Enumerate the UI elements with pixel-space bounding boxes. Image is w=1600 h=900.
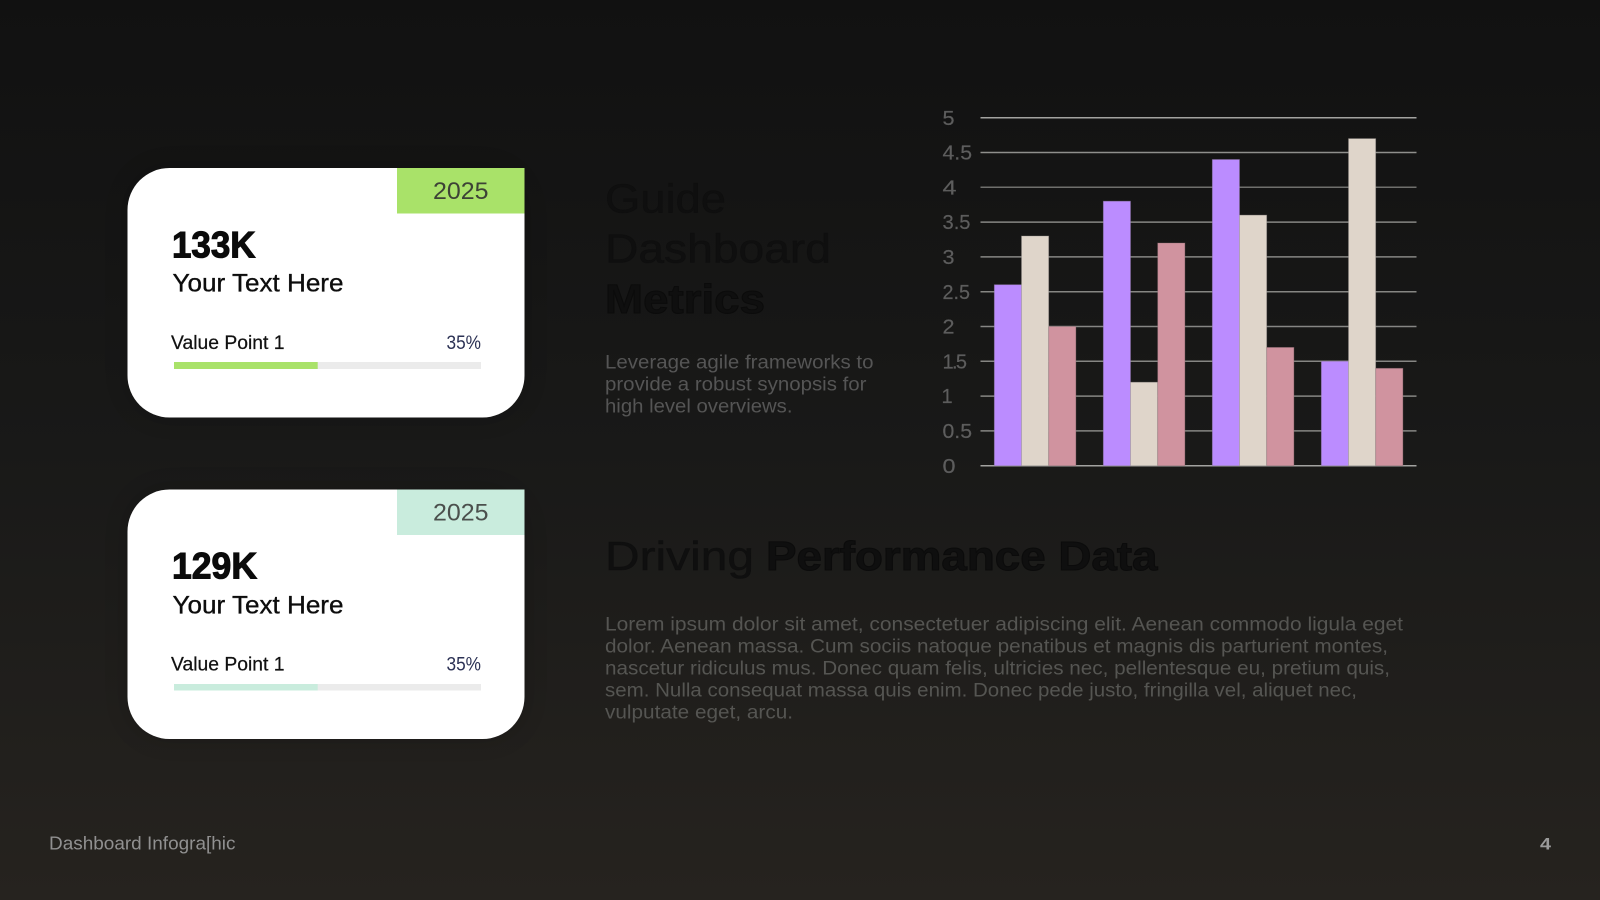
chart axis labels: 4.5 bbox=[942, 143, 972, 165]
text block: lorem ipsum: nascetur ridiculus mus. Donec quam felis, ultricies nec, pellentesque eu, pretium quis, bbox=[605, 659, 1390, 680]
text block: lorem ipsum bbox=[605, 615, 1404, 724]
panel: card 1 bbox=[128, 168, 524, 418]
year badge: card 2: 2025 bbox=[433, 500, 488, 526]
heading: guide dashboard metrics bbox=[605, 176, 831, 322]
text block: lorem ipsum: vulputate eget, arcu. bbox=[605, 703, 793, 724]
text block: lorem ipsum: sem. Nulla consequat massa quis enim. Donec pede justo, fringilla vel, aliquet nec, bbox=[605, 681, 1357, 702]
chart bars: series 3 bbox=[1049, 243, 1403, 466]
chart bars: series 1 bbox=[994, 160, 1348, 466]
heading: driving performance data: Driving bbox=[605, 533, 754, 579]
metric: 129K: 129K bbox=[172, 546, 257, 586]
chart axis labels: 2 bbox=[942, 317, 954, 339]
chart axis labels bbox=[942, 108, 972, 478]
panel: card 2 bbox=[128, 490, 524, 739]
chart axis labels: 1.5 bbox=[942, 351, 967, 373]
chart axis labels: 0 bbox=[942, 456, 956, 478]
chart axis labels: 4 bbox=[942, 177, 956, 199]
chart bars: series 2 bbox=[1022, 139, 1376, 466]
value point label: Value Point 1 bbox=[171, 654, 284, 676]
metric: 133K: 133K bbox=[172, 224, 256, 266]
text block: leverage: Leverage agile frameworks to bbox=[605, 353, 874, 374]
bar chart bbox=[942, 108, 1416, 478]
text block: leverage bbox=[605, 353, 874, 417]
value point label: Value Point 1 bbox=[171, 332, 284, 354]
value point percent: 35% bbox=[446, 654, 481, 676]
heading: guide dashboard metrics: Metrics bbox=[605, 276, 765, 322]
text block: lorem ipsum: Lorem ipsum dolor sit amet, consectetuer adipiscing elit. Aenean commodo ligula eget bbox=[605, 615, 1404, 636]
year badge: card 1 bbox=[397, 168, 524, 214]
chart axis labels: 5 bbox=[942, 108, 954, 130]
page number: 4 bbox=[1540, 834, 1552, 854]
heading: guide dashboard metrics: Dashboard bbox=[605, 226, 831, 272]
text block: leverage: provide a robust synopsis for bbox=[605, 375, 867, 396]
heading: guide dashboard metrics: Guide bbox=[605, 176, 726, 222]
text block: lorem ipsum: dolor. Aenean massa. Cum sociis natoque penatibus et magnis dis parturient montes, bbox=[605, 637, 1388, 658]
label: your text here: Your Text Here bbox=[172, 270, 344, 298]
chart axis labels: 3 bbox=[942, 247, 954, 269]
progress bar: card 1 bbox=[174, 362, 481, 369]
year badge: card 2 bbox=[397, 490, 524, 535]
text block: leverage: high level overviews. bbox=[605, 396, 792, 417]
label: your text here: Your Text Here bbox=[172, 591, 344, 619]
chart axis labels: 1 bbox=[942, 386, 953, 408]
progress bar: card 2 bbox=[174, 684, 481, 690]
footer label: Dashboard Infogra[hic bbox=[49, 834, 236, 854]
value point percent: 35% bbox=[446, 332, 481, 354]
chart axis labels: 2.5 bbox=[942, 282, 970, 304]
heading: driving performance data bbox=[605, 533, 1159, 579]
year badge: card 1: 2025 bbox=[433, 178, 488, 205]
heading: driving performance data: Performance Data bbox=[766, 533, 1159, 579]
chart axis labels: 3.5 bbox=[942, 212, 970, 234]
chart axis labels: 0.5 bbox=[942, 421, 972, 443]
